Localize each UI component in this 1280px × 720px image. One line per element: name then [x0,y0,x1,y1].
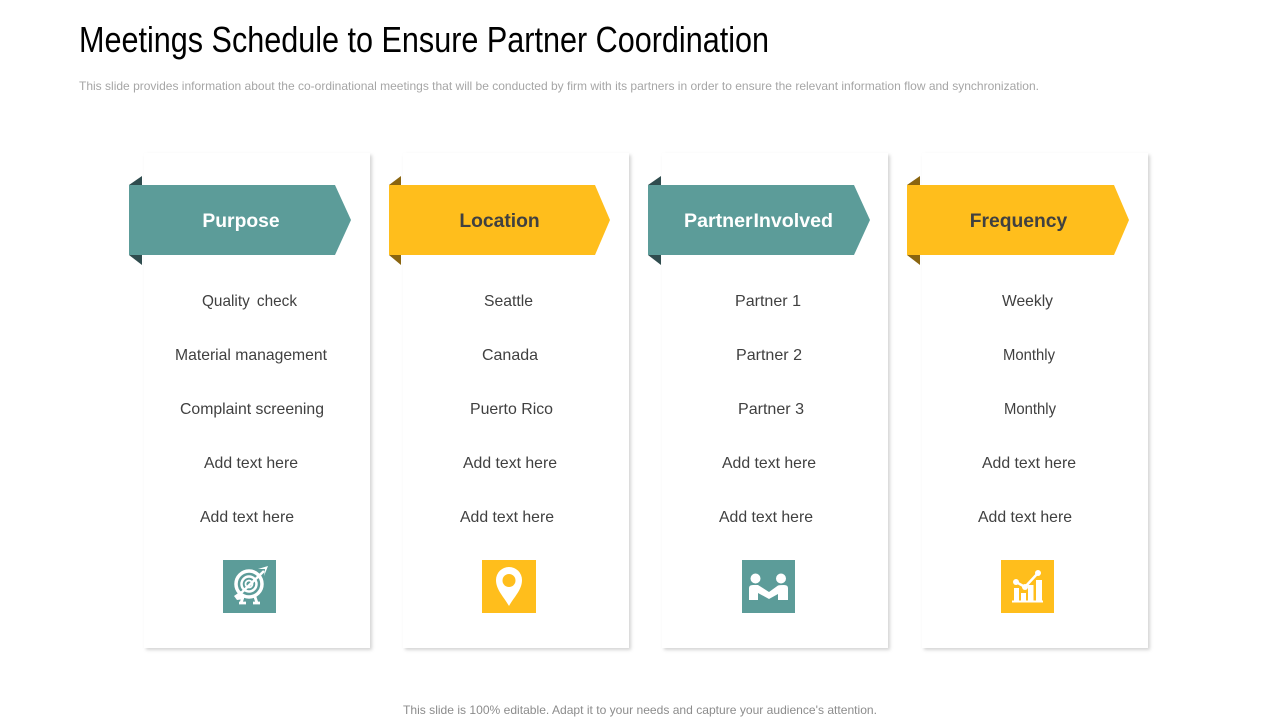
ribbon: location [389,176,610,265]
panel background: purpose [144,153,370,648]
list: partner involved: Partner 3 [738,401,804,418]
subtitle: This slide provides information about the co-ordinational meetings that will be conducted by firm with its partners in order to ensure the relevant information flow and synchronization. [79,79,1039,93]
list: purpose: Complaint screening [180,401,324,418]
ribbon: frequency [907,176,1129,265]
list: frequency [978,293,1076,526]
panel background: location [403,153,629,648]
list: partner involved: Partner 1 [735,293,801,310]
list: frequency: Weekly [1002,293,1053,310]
ribbon: partner involved: Partner Involved [684,211,833,232]
list: partner involved: Add text here [722,455,816,472]
list: purpose: Quality check [202,293,298,310]
ribbon: frequency: Frequency [970,211,1068,232]
list: frequency: Add text here [978,509,1072,526]
ribbon: purpose [129,176,351,265]
ribbon: location: Location [459,211,540,232]
list: location: Add text here [460,509,554,526]
title: Meetings Schedule to Ensure Partner Coordination [79,19,769,60]
panel background: frequency [922,153,1148,648]
panel: purpose [129,153,370,648]
icon: handshake [742,560,795,613]
icon: bar chart with trend line [1001,560,1054,613]
list: location: Add text here [463,455,557,472]
list: location [460,293,557,526]
list: frequency: Monthly [1003,347,1055,364]
list: partner involved [719,293,816,526]
footer note: This slide is 100% editable. Adapt it to your needs and capture your audience's attention. [403,703,877,717]
list: partner involved: Add text here [719,509,813,526]
list: purpose: Add text here [204,455,298,472]
list: purpose: Material management [175,347,328,364]
list: location: Canada [482,347,538,364]
list: partner involved: Partner 2 [736,347,802,364]
panel: partner involved [648,153,888,648]
icon: target with arrow [223,560,276,613]
ribbon: partner involved [648,176,870,265]
list: purpose: Add text here [200,509,294,526]
icon: map pin [482,560,536,613]
list: location: Seattle [484,293,533,310]
list: purpose [175,293,328,526]
list: location: Puerto Rico [470,401,553,418]
panel: location [389,153,629,648]
list: frequency: Add text here [982,455,1076,472]
ribbon: purpose: Purpose [202,211,280,232]
list: frequency: Monthly [1004,401,1056,418]
panel background: partner involved [662,153,888,648]
panel: frequency [907,153,1148,648]
